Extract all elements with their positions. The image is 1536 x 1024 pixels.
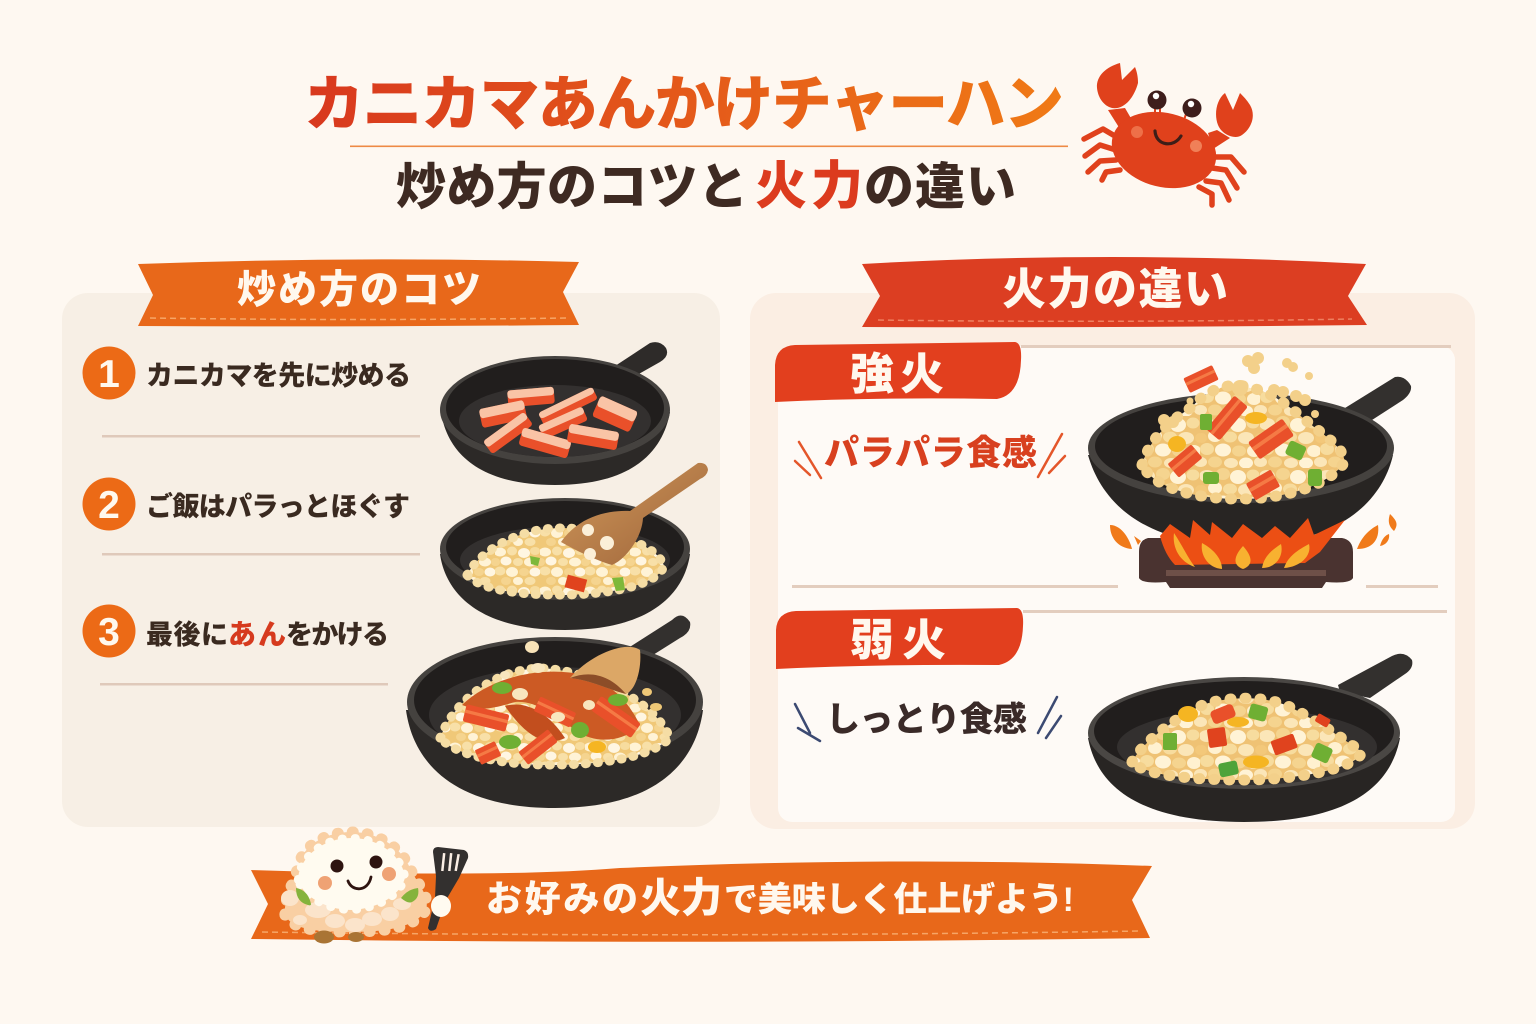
step 2 <box>82 478 420 556</box>
tab: strong heat: 強火 <box>850 350 944 399</box>
subtitle: 炒め方のコツと <box>396 159 748 215</box>
step 3: をかける <box>286 620 389 650</box>
tab: weak heat <box>776 608 1447 669</box>
step 3 <box>82 604 389 686</box>
heading ribbon: heat difference <box>862 257 1367 327</box>
icon: spatula <box>428 847 468 931</box>
illustration: pan over weak heat <box>1088 654 1412 822</box>
step 1 <box>82 346 420 438</box>
step 1: 1 <box>98 353 120 396</box>
title: カニカマあんかけチャーハン <box>304 71 1064 138</box>
step 2: 2 <box>98 484 120 527</box>
icon: crab <box>1084 63 1253 205</box>
subtitle: 火力 <box>755 158 863 216</box>
panel: heat difference <box>750 293 1475 829</box>
bottom banner: で美味しく仕上げよう! <box>724 881 1074 919</box>
divider lines under strong heat <box>792 585 1438 588</box>
callout: fluffy dry texture: パラパラ食感 <box>824 434 1037 473</box>
tab: weak heat: 弱火 <box>850 616 946 665</box>
heading ribbon: heat difference: 火力の違い <box>1002 265 1228 314</box>
illustration: pan with crab sticks <box>440 342 670 485</box>
callout: moist texture: しっとり食感 <box>826 700 1027 739</box>
heading ribbon: stir-fry tips: 炒め方のコツ <box>237 269 481 312</box>
step 3: 3 <box>98 611 120 654</box>
callout: moist texture <box>795 697 1061 741</box>
subtitle <box>396 158 1016 216</box>
subtitle: の違い <box>864 159 1016 215</box>
step 2: ご飯はパラっとほぐす <box>146 491 410 522</box>
tab: strong heat <box>775 342 1451 402</box>
illustration: pan with loosened rice and spatula <box>440 463 708 630</box>
bottom banner <box>251 861 1152 942</box>
mascot: rice ball character <box>281 832 427 944</box>
illustration: pan with sauce poured over rice <box>406 615 703 808</box>
step 3: 最後に <box>146 620 228 650</box>
heading ribbon: stir-fry tips <box>138 259 579 326</box>
step 1: カニカマを先に炒める <box>146 361 411 391</box>
panel: stir-fry tips <box>62 293 720 827</box>
step 3: あん <box>228 619 286 650</box>
bottom banner: 火力 <box>640 875 722 921</box>
illustration: wok over strong flame <box>1088 352 1411 588</box>
callout: fluffy dry texture <box>795 434 1065 478</box>
bottom banner: お好みの <box>486 878 638 919</box>
